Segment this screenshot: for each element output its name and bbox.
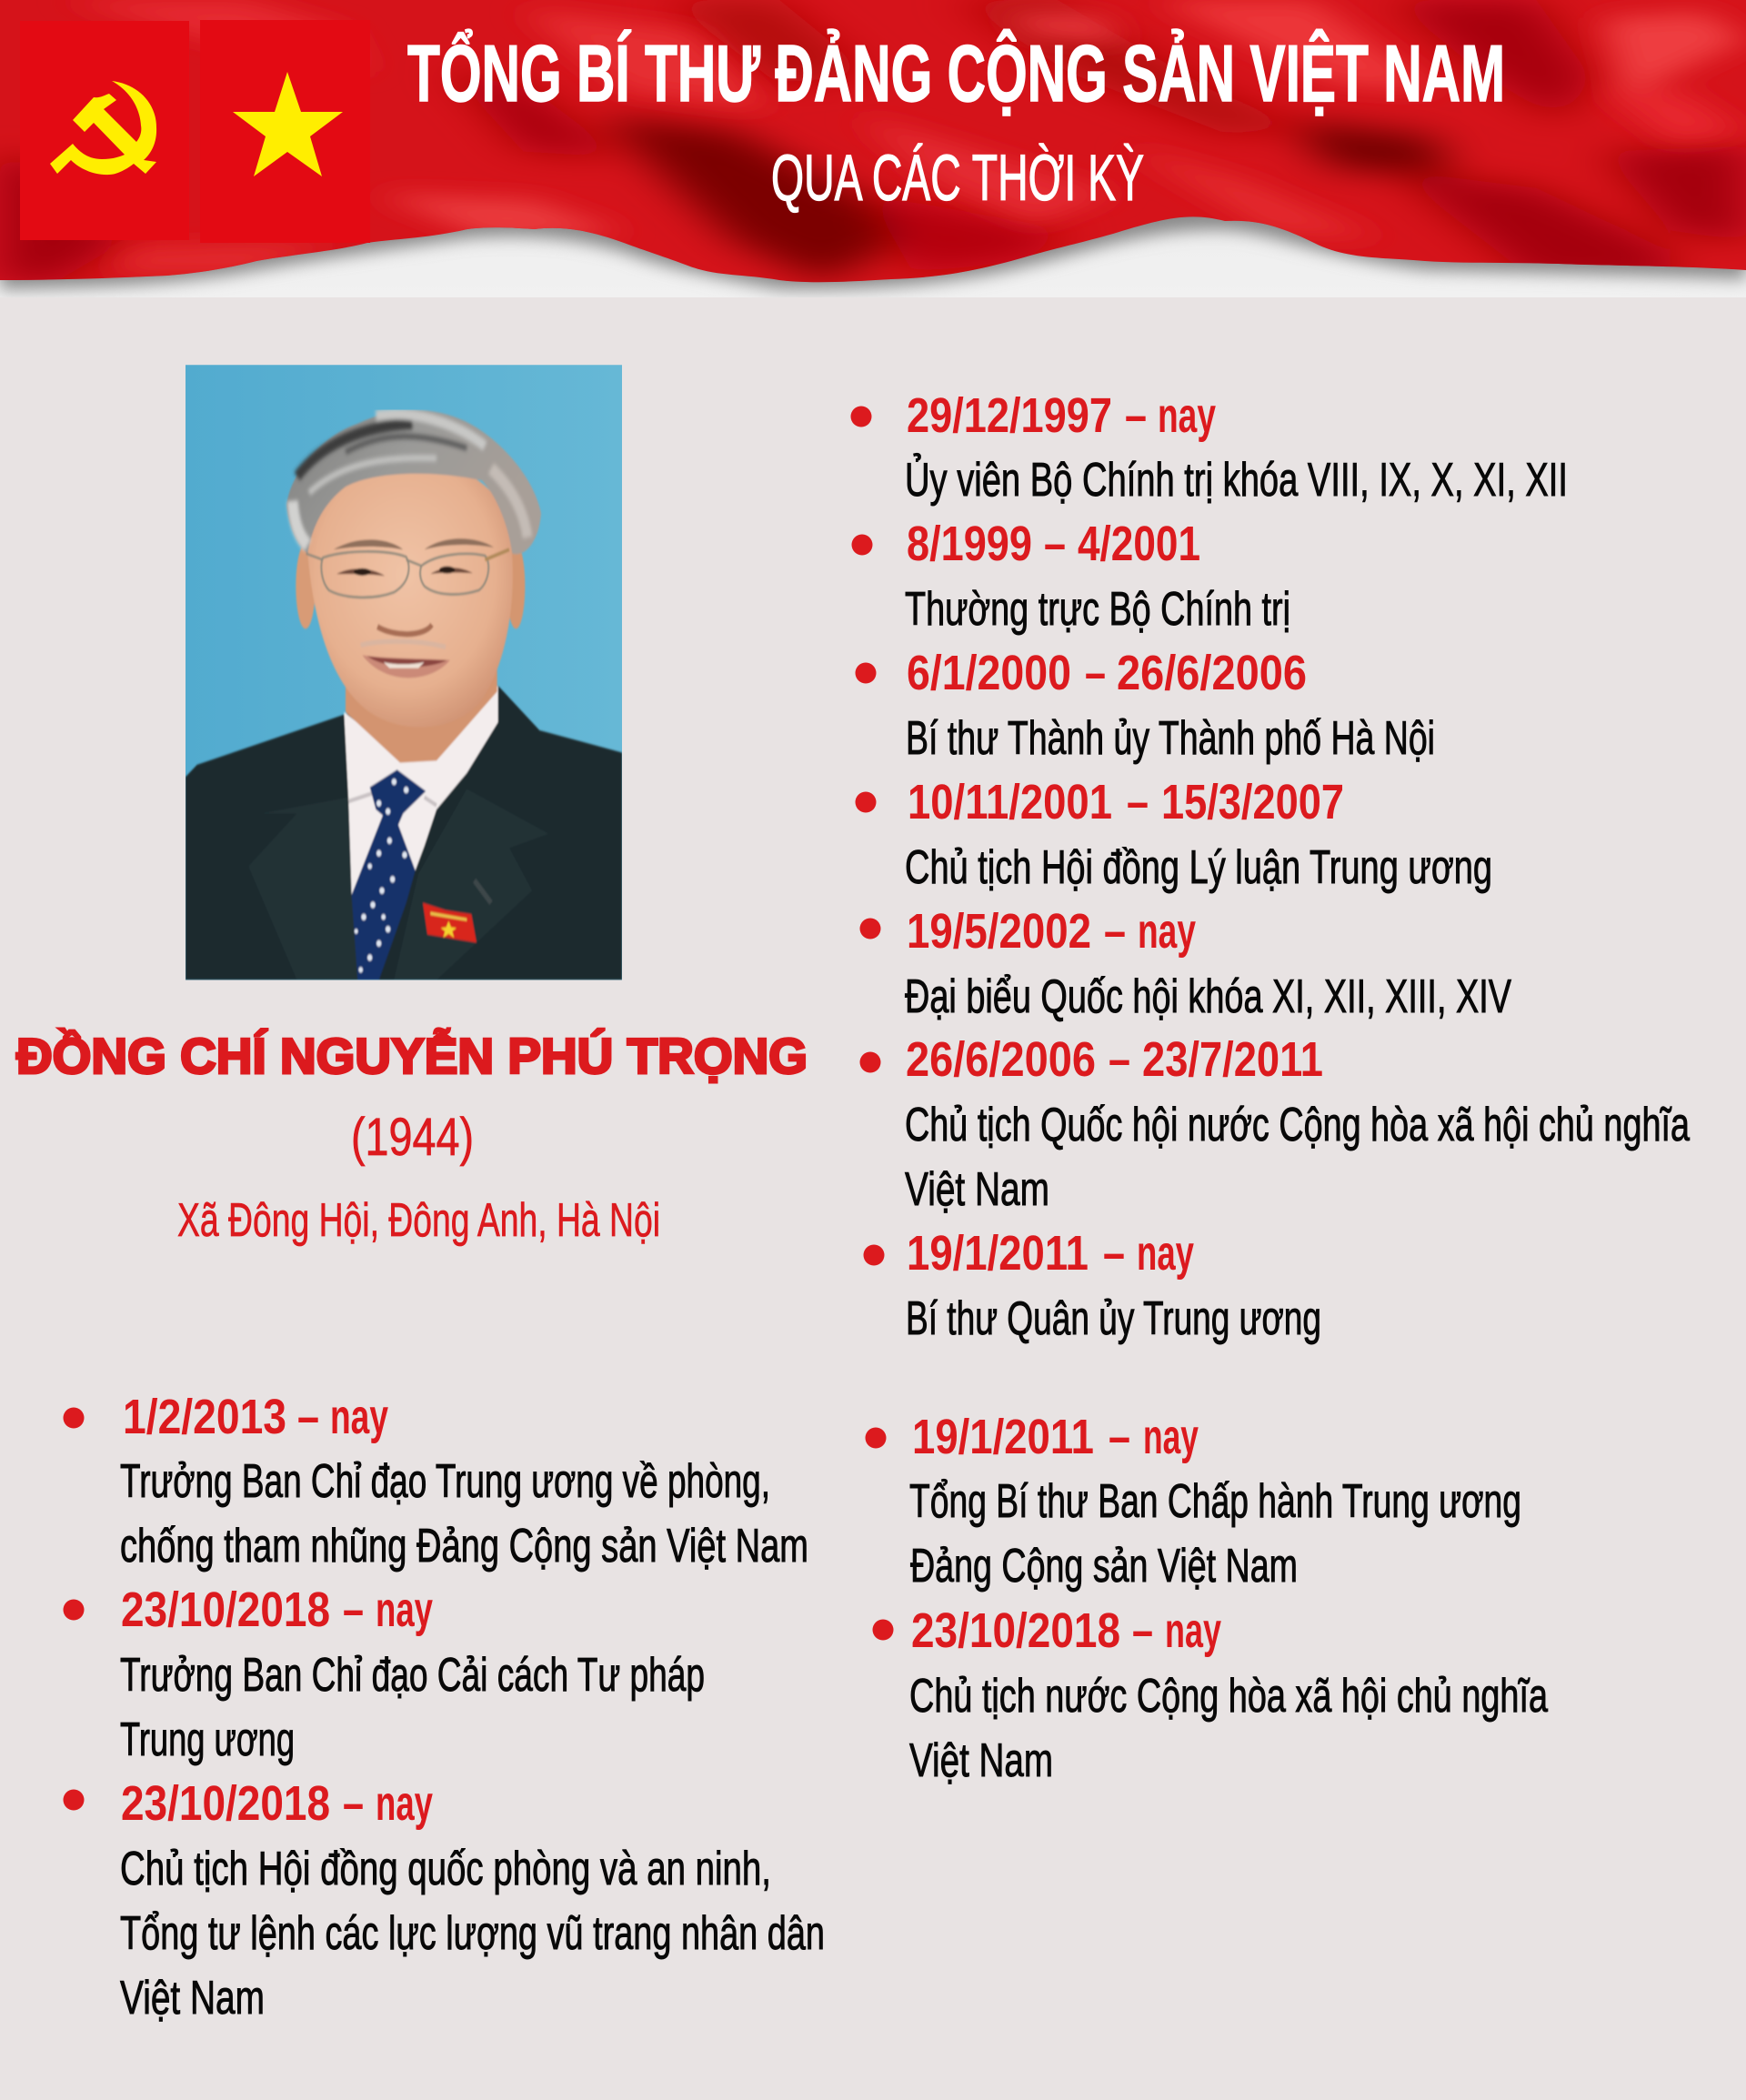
entry: 26/6/2006: Việt Nam — [905, 1163, 1049, 1216]
entry: 1/2/2013 — [64, 1390, 808, 1572]
entry: 19/1/2011: Bí thư Quân ủy Trung ương — [906, 1292, 1321, 1345]
entry: 19/5/2002 — [860, 904, 1511, 1023]
entry: 8/1999 — [851, 517, 1290, 636]
entry: 6/1/2000: 6/1/2000 — [907, 646, 1071, 700]
entry: 23/10/2018 defence council: nay — [376, 1776, 433, 1831]
entry: 29/12/1997: 29/12/1997 — [907, 388, 1112, 443]
entry: 23/10/2018 president — [873, 1603, 1548, 1787]
entry: 19/1/2011 general secretary: nay — [1143, 1410, 1199, 1464]
entry: 8/1999: – — [1044, 517, 1066, 571]
birth year: (1944) — [351, 1108, 474, 1167]
entry: 19/5/2002: Đại biểu Quốc hội khóa XI, XII, XIII, XIV — [905, 970, 1511, 1023]
entry: 26/6/2006: – — [1109, 1032, 1130, 1087]
entry: 6/1/2000 — [855, 646, 1435, 765]
entry: 19/5/2002: nay — [1138, 904, 1196, 959]
entry: 23/10/2018 judicial reform: – — [343, 1583, 364, 1637]
entry: 23/10/2018 president: Việt Nam — [909, 1734, 1053, 1787]
entry: 23/10/2018 judicial reform: Trưởng Ban Chỉ đạo Cải cách Tư pháp — [120, 1649, 705, 1702]
entry: 8/1999: 8/1999 — [907, 517, 1032, 571]
entry: 23/10/2018 defence council: – — [343, 1776, 364, 1831]
entry: 10/11/2001 — [855, 775, 1492, 894]
entry: 19/5/2002: 19/5/2002 — [907, 904, 1091, 959]
entry: 23/10/2018 defence council — [64, 1776, 825, 2025]
entry: 19/5/2002: – — [1104, 904, 1126, 959]
entry: 19/1/2011: nay — [1137, 1226, 1194, 1281]
entry: 1/2/2013: Trưởng Ban Chỉ đạo Trung ương về phòng, — [120, 1455, 770, 1508]
entry: 29/12/1997: nay — [1158, 388, 1216, 443]
entry: 1/2/2013: nay — [330, 1390, 388, 1444]
entry: 23/10/2018 judicial reform — [64, 1583, 705, 1766]
entry: 19/1/2011 — [864, 1226, 1321, 1345]
entry: 1/2/2013: 1/2/2013 — [123, 1390, 286, 1444]
person name: ĐỒNG CHÍ NGUYỄN PHÚ TRỌNG — [16, 1028, 808, 1084]
subtitle: QUA CÁC THỜI KỲ — [771, 143, 1144, 215]
entry: 23/10/2018 judicial reform: nay — [376, 1583, 433, 1637]
entry: 10/11/2001: 10/11/2001 — [908, 775, 1112, 829]
entry: 19/1/2011 general secretary — [866, 1410, 1521, 1593]
entry: 29/12/1997 — [851, 388, 1568, 507]
entry: 6/1/2000: – — [1085, 646, 1106, 700]
entry: 1/2/2013: chống tham nhũng Đảng Cộng sản Việt Nam — [120, 1520, 808, 1572]
entry: 19/1/2011 general secretary: Tổng Bí thư Ban Chấp hành Trung ương — [909, 1475, 1521, 1528]
entry: 23/10/2018 defence council: 23/10/2018 — [121, 1776, 330, 1831]
entry: 26/6/2006: 26/6/2006 — [906, 1032, 1096, 1087]
flag: Communist Party hammer and sickle — [20, 21, 189, 240]
timeline list: upper right — [851, 388, 1690, 1345]
entry: 19/1/2011: – — [1103, 1226, 1125, 1281]
entry: 23/10/2018 defence council: Chủ tịch Hội đồng quốc phòng và an ninh, — [120, 1843, 771, 1895]
entry: 23/10/2018 defence council: Việt Nam — [120, 1972, 265, 2025]
entry: 23/10/2018 judicial reform: Trung ương — [120, 1713, 295, 1766]
icon: yellow star — [233, 72, 343, 176]
entry: 23/10/2018 judicial reform: 23/10/2018 — [121, 1583, 330, 1637]
entry: 23/10/2018 president: 23/10/2018 — [911, 1603, 1120, 1658]
entry: 10/11/2001: 15/3/2007 — [1161, 775, 1344, 829]
timeline list: lower right — [866, 1410, 1548, 1787]
header banner: red flag — [0, 0, 1746, 300]
entry: 19/1/2011 general secretary: Đảng Cộng sản Việt Nam — [910, 1540, 1298, 1593]
timeline list: lower left — [64, 1390, 825, 2025]
entry: 23/10/2018 president: – — [1132, 1603, 1153, 1658]
portrait photo — [186, 365, 622, 980]
entry: 26/6/2006 — [860, 1032, 1690, 1216]
entry: 29/12/1997: – — [1125, 388, 1147, 443]
icon: hammer and sickle — [50, 81, 156, 175]
entry: 19/1/2011: 19/1/2011 — [907, 1226, 1089, 1281]
entry: 8/1999: 4/2001 — [1078, 517, 1200, 571]
entry: 10/11/2001: – — [1127, 775, 1149, 829]
entry: 1/2/2013: – — [297, 1390, 319, 1444]
flag: Vietnam yellow star — [200, 20, 370, 243]
entry: 23/10/2018 president: nay — [1165, 1603, 1221, 1658]
entry: 23/10/2018 defence council: Tổng tư lệnh các lực lượng vũ trang nhân dân — [120, 1907, 825, 1960]
entry: 19/1/2011 general secretary: – — [1109, 1410, 1130, 1464]
entry: 6/1/2000: Bí thư Thành ủy Thành phố Hà Nội — [906, 712, 1435, 765]
entry: 19/1/2011 general secretary: 19/1/2011 — [912, 1410, 1094, 1464]
entry: 6/1/2000: 26/6/2006 — [1117, 646, 1307, 700]
birthplace: Xã Đông Hội, Đông Anh, Hà Nội — [177, 1194, 660, 1247]
entry: 10/11/2001: Chủ tịch Hội đồng Lý luận Trung ương — [905, 841, 1492, 894]
entry: 8/1999: Thường trực Bộ Chính trị — [905, 583, 1290, 636]
entry: 26/6/2006: 23/7/2011 — [1142, 1032, 1323, 1087]
